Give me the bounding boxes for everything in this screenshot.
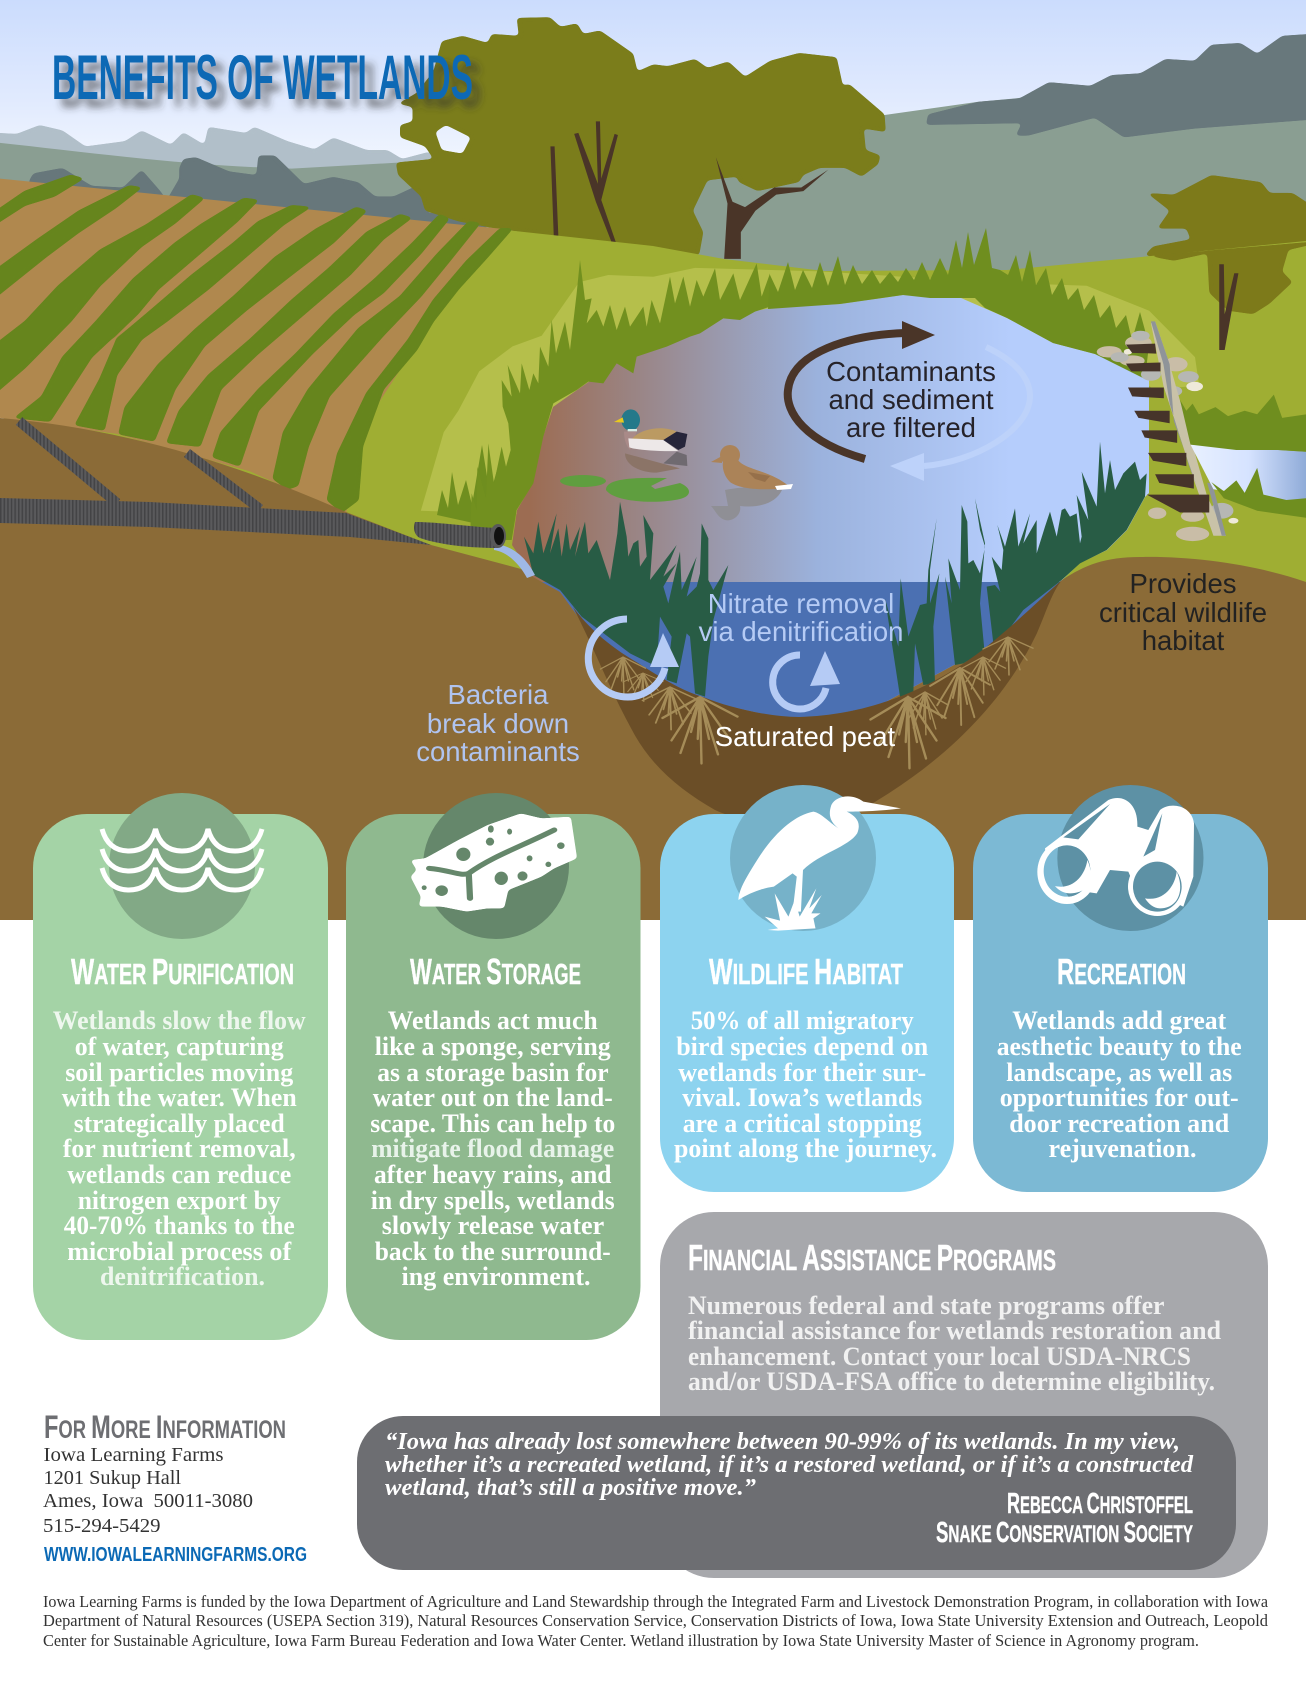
dark slate tree line, right — [926, 32, 1306, 137]
icon: binoculars — [1037, 798, 1194, 916]
lily pads — [560, 475, 689, 502]
text: water purification body: microbial process of — [67, 1236, 292, 1266]
text: water storage body: mitigate flood damage — [371, 1133, 614, 1163]
text: water purification body: Wetlands slow the flow — [53, 1005, 306, 1035]
text: wildlife habitat body: are a critical stopping — [683, 1108, 922, 1138]
wetland landscape illustration — [0, 0, 1306, 920]
label: provides critical wildlife habitat: habitat — [1142, 625, 1225, 656]
icon: sponge — [410, 813, 577, 912]
wetland reeds, left bank — [524, 502, 728, 697]
text: water storage body: as a storage basin for — [377, 1057, 609, 1087]
text: financial assistance body: enhancement. Contact your local USDA-NRCS — [688, 1341, 1191, 1371]
text: water purification body: nitrogen export by — [78, 1185, 281, 1215]
heading: wildlife habitat: WILDLIFE HABITAT — [709, 951, 903, 992]
text: water storage body: after heavy rains, and — [374, 1159, 612, 1189]
attribution: snake conservation society: SNAKE CONSERVATION SOCIETY — [936, 1517, 1193, 1549]
icon: heron — [738, 796, 901, 931]
text: water purification body: 40-70% thanks to the — [64, 1210, 295, 1240]
text: quote: “Iowa has already lost somewhere between 90-99% of its wetlands. In my view, — [385, 1429, 1180, 1455]
text: water purification body: wetlands can reduce — [67, 1159, 291, 1189]
icon: water waves — [102, 829, 262, 890]
text: water purification body: for nutrient removal, — [63, 1133, 296, 1163]
large tree trunks — [550, 121, 828, 259]
text: recreation body: landscape, as well as — [1006, 1057, 1232, 1087]
sky — [0, 0, 1306, 420]
label: contaminants and sediment are filtered: Contaminants — [826, 356, 996, 387]
text: recreation body: rejuvenation. — [1048, 1133, 1196, 1163]
text: address: Ames, Iowa 50011-3080 — [43, 1490, 253, 1512]
footer: funding acknowledgement: Iowa Learning Farms is funded by the Iowa Department of Agriculture and Land Stewardship through the Integrated Farm and Livestock Demonstration Program, in collaboration with Iowa — [43, 1592, 1269, 1611]
text: wildlife habitat body: wetlands for their sur- — [678, 1057, 926, 1087]
outflow stream — [1180, 395, 1306, 518]
right tree overlap on meadow and trunk — [1145, 241, 1306, 350]
panel: wildlife habitat — [660, 785, 954, 1192]
text: water storage body: water out on the land- — [373, 1082, 613, 1112]
heading: financial assistance programs: FINANCIAL ASSISTANCE PROGRAMS — [688, 1237, 1056, 1278]
soil cross-section — [0, 418, 1306, 920]
label: provides critical wildlife habitat: Provides — [1130, 568, 1236, 599]
label: contaminants and sediment are filtered: and sediment — [828, 384, 994, 415]
footer: funding acknowledgement: Center for Sustainable Agriculture, Iowa Farm Bureau Federation and Iowa Water Center. Wetland illustration by Iowa State University Master of Science in Agronomy program. — [43, 1631, 1199, 1650]
text: address: Iowa Learning Farms — [44, 1444, 224, 1466]
text: water storage body: Wetlands act much — [388, 1005, 598, 1035]
wetland plant roots — [600, 637, 1033, 768]
text: recreation body: Wetlands add great — [1012, 1005, 1226, 1035]
text: water purification body: of water, capturing — [75, 1031, 284, 1061]
text: water storage body: back to the surround- — [375, 1236, 611, 1266]
lighter green bank around pond — [421, 268, 1199, 514]
text: quote: whether it’s a recreated wetland, if it’s a restored wetland, or if it’s a constructed — [385, 1452, 1194, 1478]
text: financial assistance body: Numerous federal and state programs offer — [688, 1290, 1165, 1320]
distant pale hills — [0, 125, 458, 171]
small right tree — [1145, 175, 1306, 314]
attribution: rebecca christoffel: REBECCA CHRISTOFFEL — [1007, 1488, 1193, 1520]
text: water storage body: scape. This can help to — [370, 1108, 615, 1138]
large tree canopy — [396, 17, 886, 255]
dark slate tree line, left — [29, 155, 652, 250]
shoreline grasses, left — [470, 260, 770, 540]
text: water storage body: ing environment. — [402, 1261, 590, 1291]
block: for more information — [43, 1409, 307, 1566]
label: provides critical wildlife habitat: critical wildlife — [1099, 597, 1267, 628]
icon: female duck — [711, 445, 793, 520]
label: bacteria break down contaminants: contaminants — [416, 736, 580, 767]
text: recreation body: opportunities for out- — [1000, 1082, 1239, 1112]
text: wildlife habitat body: bird species depend on — [676, 1031, 928, 1061]
arrow: filtered water return, light — [890, 347, 1030, 481]
heading: for more information: FOR MORE INFORMATION — [44, 1409, 286, 1445]
deep anaerobic water zone — [542, 582, 1060, 717]
text: financial assistance body: and/or USDA-FSA office to determine eligibility. — [688, 1366, 1215, 1396]
outlet pipe with water flow — [414, 522, 535, 578]
label: nitrate removal via denitrification: Nitrate removal — [708, 588, 894, 619]
shoreline grasses, top and right — [768, 228, 1149, 379]
arrow: denitrification cycle — [773, 651, 840, 709]
pond water — [512, 295, 1149, 722]
saturated peat layer — [573, 580, 1062, 824]
heading: water purification: WATER PURIFICATION — [71, 951, 294, 992]
panel: water purification — [33, 793, 328, 1340]
label: contaminants and sediment are filtered: are filtered — [846, 412, 976, 443]
text: water purification body: soil particles moving — [65, 1057, 293, 1087]
text: water storage body: in dry spells, wetlands — [371, 1185, 615, 1215]
green meadow ground — [0, 229, 1306, 600]
footer: funding acknowledgement: Department of Natural Resources (USEPA Section 319), Natural Resources Conservation Service, Conservation Districts of Iowa, Iowa State University Extension and Outreach, Leopold — [43, 1611, 1269, 1630]
heading: recreation: RECREATION — [1057, 951, 1186, 992]
text: wildlife habitat body: vival. Iowa’s wetlands — [682, 1082, 922, 1112]
title: BENEFITS OF WETLANDS — [52, 43, 473, 113]
text: website: WWW.IOWALEARNINGFARMS.ORG — [44, 1543, 307, 1566]
text: water storage body: slowly release water — [382, 1210, 604, 1240]
crop field — [0, 179, 500, 514]
text: address: 1201 Sukup Hall — [44, 1467, 181, 1489]
crop rows — [0, 175, 513, 512]
text: water purification body: strategically placed — [74, 1108, 285, 1138]
label: saturated peat: Saturated peat — [715, 721, 896, 752]
text: wildlife habitat body: point along the journey. — [674, 1133, 937, 1163]
grey-green rolling hill — [0, 71, 1306, 286]
label: nitrate removal via denitrification: via denitrification — [699, 616, 903, 647]
icon: mallard duck — [614, 409, 687, 473]
text: financial assistance body: financial assistance for wetlands restoration and — [688, 1315, 1221, 1345]
arrow: bacteria cycle — [588, 619, 679, 697]
label: bacteria break down contaminants: break down — [427, 708, 569, 739]
text: water purification body: denitrification. — [100, 1261, 265, 1291]
panel: recreation — [973, 785, 1268, 1192]
label: bacteria break down contaminants: Bacteria — [448, 679, 549, 710]
grass tuft behind outlet pipe — [437, 445, 505, 530]
text: recreation body: aesthetic beauty to the — [997, 1031, 1242, 1061]
text: water storage body: like a sponge, serving — [375, 1031, 611, 1061]
panel: quote — [357, 1416, 1236, 1570]
heading: water storage: WATER STORAGE — [410, 951, 581, 992]
subsurface drainage tile pipes — [0, 421, 431, 545]
text: water purification body: with the water. When — [62, 1082, 297, 1112]
wetland reeds, right bank — [885, 442, 1147, 697]
water control structure with rocks — [1097, 321, 1306, 541]
text: address: 515-294-5429 — [43, 1515, 160, 1537]
panel: water storage — [346, 793, 640, 1340]
text: recreation body: door recreation and — [1009, 1108, 1229, 1138]
text: quote: wetland, that’s still a positive move.” — [385, 1475, 756, 1501]
arrow: contaminants filtered, dark — [788, 321, 935, 459]
text: wildlife habitat body: 50% of all migratory — [691, 1005, 914, 1035]
panel: financial assistance programs — [660, 1212, 1268, 1578]
